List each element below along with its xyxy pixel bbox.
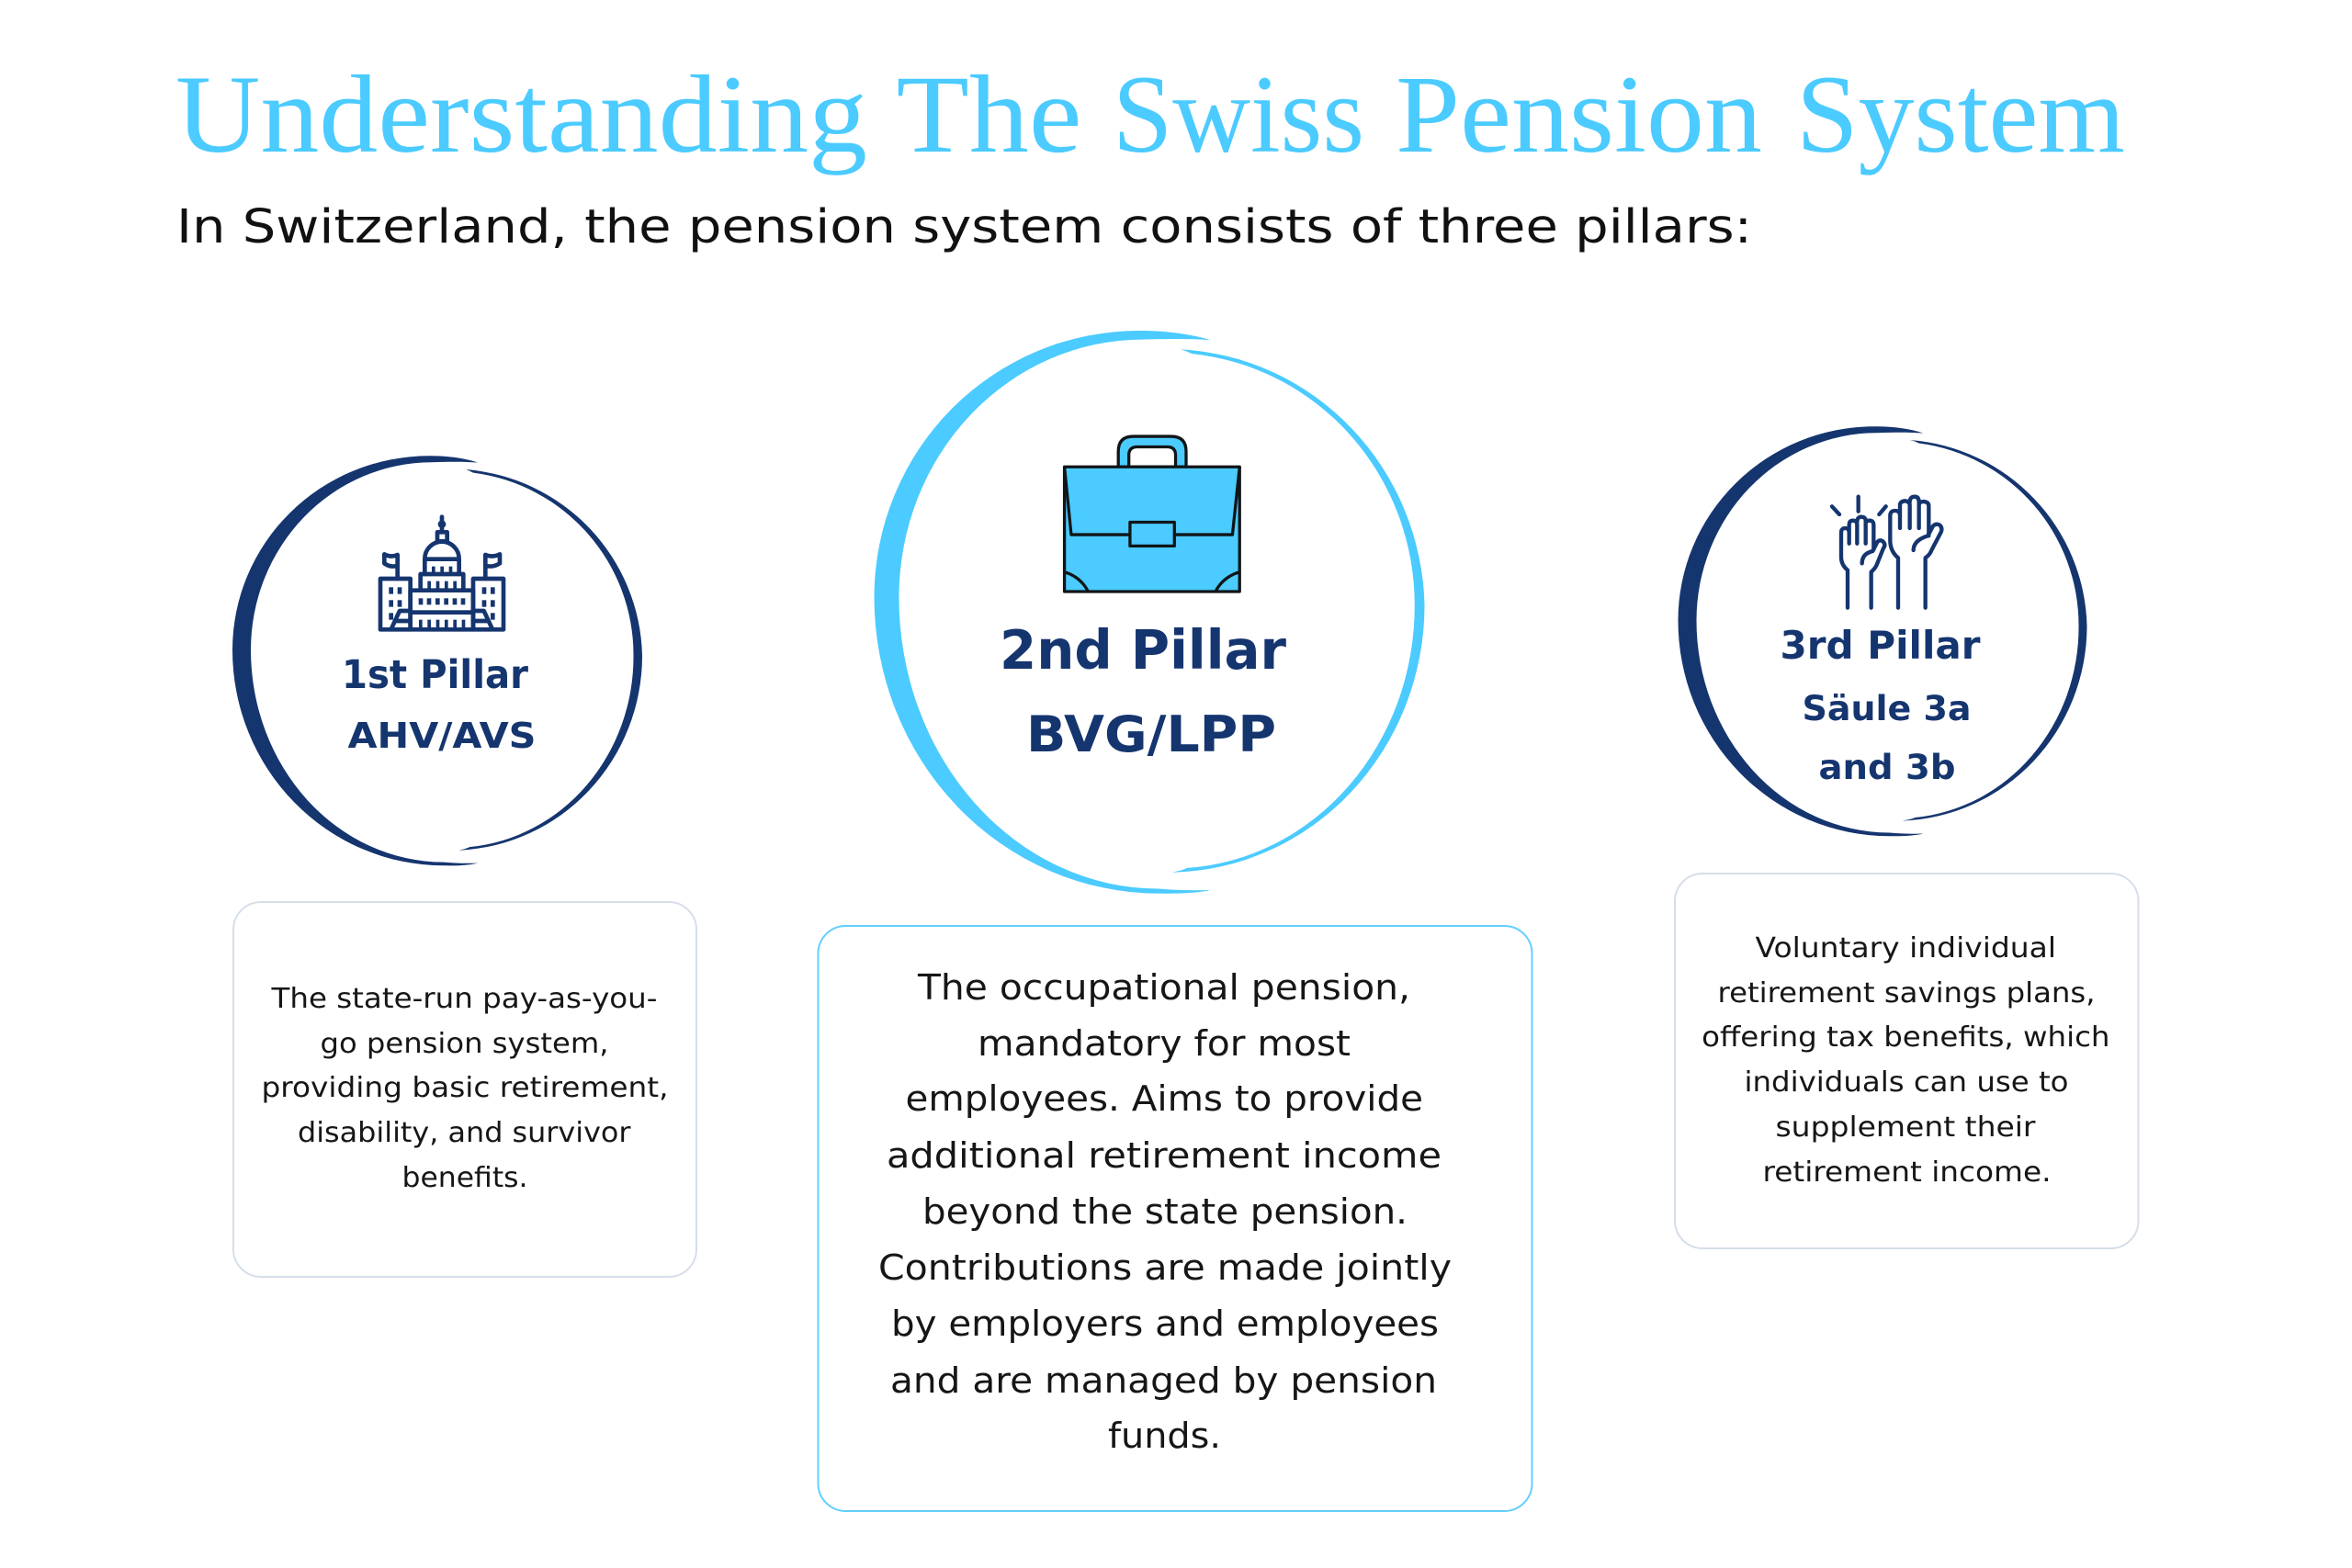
description text: and are managed by pension (890, 1360, 1437, 1401)
description text (1702, 932, 2109, 1189)
card outline (1675, 874, 2139, 1248)
description text: go pension system, (320, 1028, 608, 1060)
panel: 2nd pillar circle (875, 331, 1425, 894)
description text: by employers and employees (891, 1303, 1439, 1344)
description text: providing basic retirement, (261, 1072, 669, 1104)
brush ring (875, 331, 1425, 894)
title: Swiss (1113, 53, 1364, 176)
subheading: BVG/LPP: BVG/LPP (1026, 705, 1276, 763)
title: System (1796, 53, 2125, 176)
title (175, 53, 2125, 176)
description text: beyond the state pension. (922, 1191, 1408, 1232)
description text (878, 967, 1452, 1456)
heading: 2nd Pillar: 2nd Pillar (1000, 618, 1286, 682)
description text: offering tax benefits, which (1702, 1021, 2109, 1054)
description text: supplement their (1775, 1111, 2036, 1144)
panel: 3rd pillar circle (1678, 426, 2087, 836)
description text: retirement savings plans, (1718, 977, 2095, 1010)
heading: 1st Pillar: 1st Pillar (342, 652, 529, 698)
icon: raised hands (1832, 497, 1941, 608)
brush ring (232, 456, 642, 865)
icon: briefcase (1065, 436, 1239, 592)
description text: funds. (1108, 1416, 1221, 1456)
description text (261, 983, 669, 1194)
brush ring (1678, 426, 2087, 836)
title: Understanding (175, 53, 867, 176)
description text: individuals can use to (1744, 1066, 2069, 1099)
panel: 1st pillar description (233, 902, 696, 1277)
subtitle: In Switzerland, the pension system consists of three pillars: (176, 200, 1752, 254)
panel: 1st pillar circle (232, 456, 642, 865)
card outline (818, 926, 1532, 1511)
subheading: AHV/AVS: AHV/AVS (347, 716, 537, 756)
panel: 3rd pillar description (1675, 874, 2139, 1248)
description text: retirement income. (1762, 1156, 2051, 1189)
title: Pension (1396, 53, 1762, 176)
subheading: Säule 3a: Säule 3a (1803, 689, 1972, 728)
subheading: and 3b: and 3b (1819, 748, 1955, 787)
title: The (897, 53, 1082, 176)
description text: mandatory for most (978, 1023, 1351, 1064)
description text: Voluntary individual (1755, 932, 2056, 964)
description text: employees. Aims to provide (906, 1078, 1423, 1119)
description text: The occupational pension, (917, 967, 1410, 1008)
icon: capitol building (380, 517, 503, 629)
description text: additional retirement income (887, 1135, 1442, 1176)
card outline (233, 902, 696, 1277)
description text: disability, and survivor (298, 1117, 631, 1149)
description text: Contributions are made jointly (878, 1247, 1452, 1288)
description text: The state-run pay-as-you- (270, 983, 658, 1015)
heading: 3rd Pillar: 3rd Pillar (1781, 623, 1981, 668)
panel: 2nd pillar description (818, 926, 1532, 1511)
description text: benefits. (402, 1162, 527, 1194)
